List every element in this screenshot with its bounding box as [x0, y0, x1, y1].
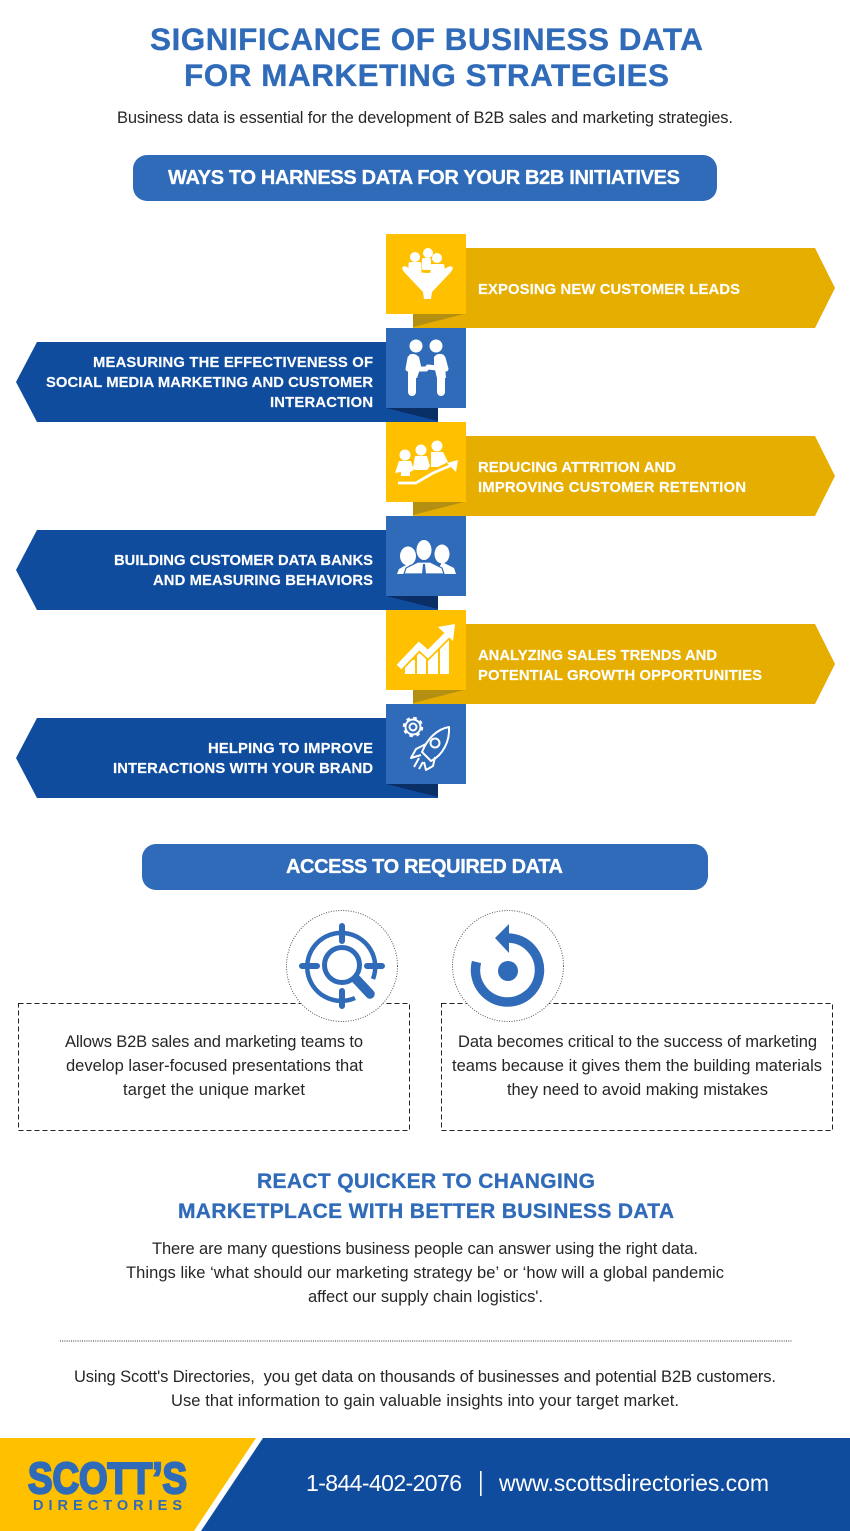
panel: building materials: Data becomes critical to the success of marketing: [458, 1033, 817, 1051]
banner: ways to harness data: [133, 155, 717, 201]
contact details: 1-844-402-2076: [306, 1470, 462, 1496]
icon: group of people: [397, 540, 456, 574]
icon: target with magnifier: [286, 910, 398, 1022]
panel: laser-focused presentations: [18, 1004, 410, 1130]
row 6: helping to improve interactions: INTERACTIONS WITH YOUR BRAND: [113, 761, 373, 777]
heading: react quicker: MARKETPLACE WITH BETTER BUSINESS DATA: [178, 1200, 674, 1223]
icon: handshake: [408, 340, 446, 392]
text block: scott's directories: [74, 1368, 776, 1410]
row 2: measuring effectiveness: SOCIAL MEDIA MARKETING AND CUSTOMER: [46, 375, 373, 391]
icon: people and rising arrow: [395, 440, 458, 483]
heading: react quicker: [178, 1170, 674, 1223]
icon: funnel with people: [402, 248, 453, 299]
banner: ways to harness data: WAYS TO HARNESS DATA FOR YOUR B2B INITIATIVES: [168, 167, 680, 189]
text block: questions: affect our supply chain logistics'.: [308, 1288, 543, 1306]
text block: questions: Things like ‘what should our marketing strategy be’ or ‘how will a global pandemic: [126, 1264, 724, 1282]
row 6: helping to improve interactions: [16, 704, 466, 798]
row 2: measuring effectiveness: MEASURING THE EFFECTIVENESS OF: [93, 355, 373, 371]
row 6: helping to improve interactions: HELPING TO IMPROVE: [208, 741, 373, 757]
row 3: reducing attrition: IMPROVING CUSTOMER RETENTION: [478, 480, 746, 496]
banner: access to required data: ACCESS TO REQUIRED DATA: [286, 856, 563, 878]
heading: react quicker: REACT QUICKER TO CHANGING: [257, 1170, 595, 1193]
banner: access to required data: [142, 844, 708, 890]
row 3: reducing attrition: REDUCING ATTRITION AND: [478, 460, 676, 476]
row 4: building customer data banks: AND MEASURING BEHAVIORS: [153, 573, 373, 589]
text block: questions: There are many questions business people can answer using the right data.: [152, 1240, 698, 1258]
text block: scott's directories: Using Scott's Directories, you get data on thousands of businesses and potential B2B customers.: [74, 1368, 776, 1386]
logo: SCOTT’S: [28, 1454, 187, 1503]
footer: [0, 1438, 850, 1531]
row 1: exposing new customer leads: [386, 234, 835, 328]
contact details: [306, 1470, 769, 1496]
text block: scott's directories: Use that information to gain valuable insights into your target market.: [171, 1392, 679, 1410]
row 2: measuring effectiveness: [16, 328, 466, 422]
title: SIGNIFICANCE OF BUSINESS DATA: [150, 21, 703, 57]
contact details: www.scottsdirectories.com: [498, 1470, 769, 1496]
row 5: analyzing sales trends: [386, 610, 835, 704]
row 5: analyzing sales trends: ANALYZING SALES TRENDS AND: [478, 648, 717, 664]
title: FOR MARKETING STRATEGIES: [184, 57, 669, 93]
text block: questions: [126, 1240, 724, 1306]
panel: building materials: [442, 1004, 832, 1130]
panel: building materials: teams because it gives them the building materials: [452, 1057, 822, 1075]
panel: laser-focused presentations: target the unique market: [123, 1081, 305, 1099]
row 4: building customer data banks: BUILDING CUSTOMER DATA BANKS: [114, 553, 373, 569]
panel: laser-focused presentations: develop laser-focused presentations that: [66, 1057, 363, 1075]
intro text: Business data is essential for the development of B2B sales and marketing strategies.: [117, 109, 733, 127]
row 2: measuring effectiveness: INTERACTION: [270, 395, 373, 411]
panel: building materials: they need to avoid making mistakes: [507, 1081, 768, 1099]
title: [150, 21, 703, 93]
row 3: reducing attrition: [386, 422, 835, 516]
row 4: building customer data banks: [16, 516, 466, 610]
icon: gear and rocket: [404, 718, 449, 770]
row 5: analyzing sales trends: POTENTIAL GROWTH OPPORTUNITIES: [478, 668, 762, 684]
panel: laser-focused presentations: Allows B2B sales and marketing teams to: [65, 1033, 363, 1051]
icon: growth chart: [399, 624, 455, 674]
logo: DIRECTORIES: [33, 1498, 182, 1514]
icon: circular arrow with dot: [452, 910, 564, 1022]
row 1: exposing new customer leads: EXPOSING NEW CUSTOMER LEADS: [478, 282, 740, 298]
